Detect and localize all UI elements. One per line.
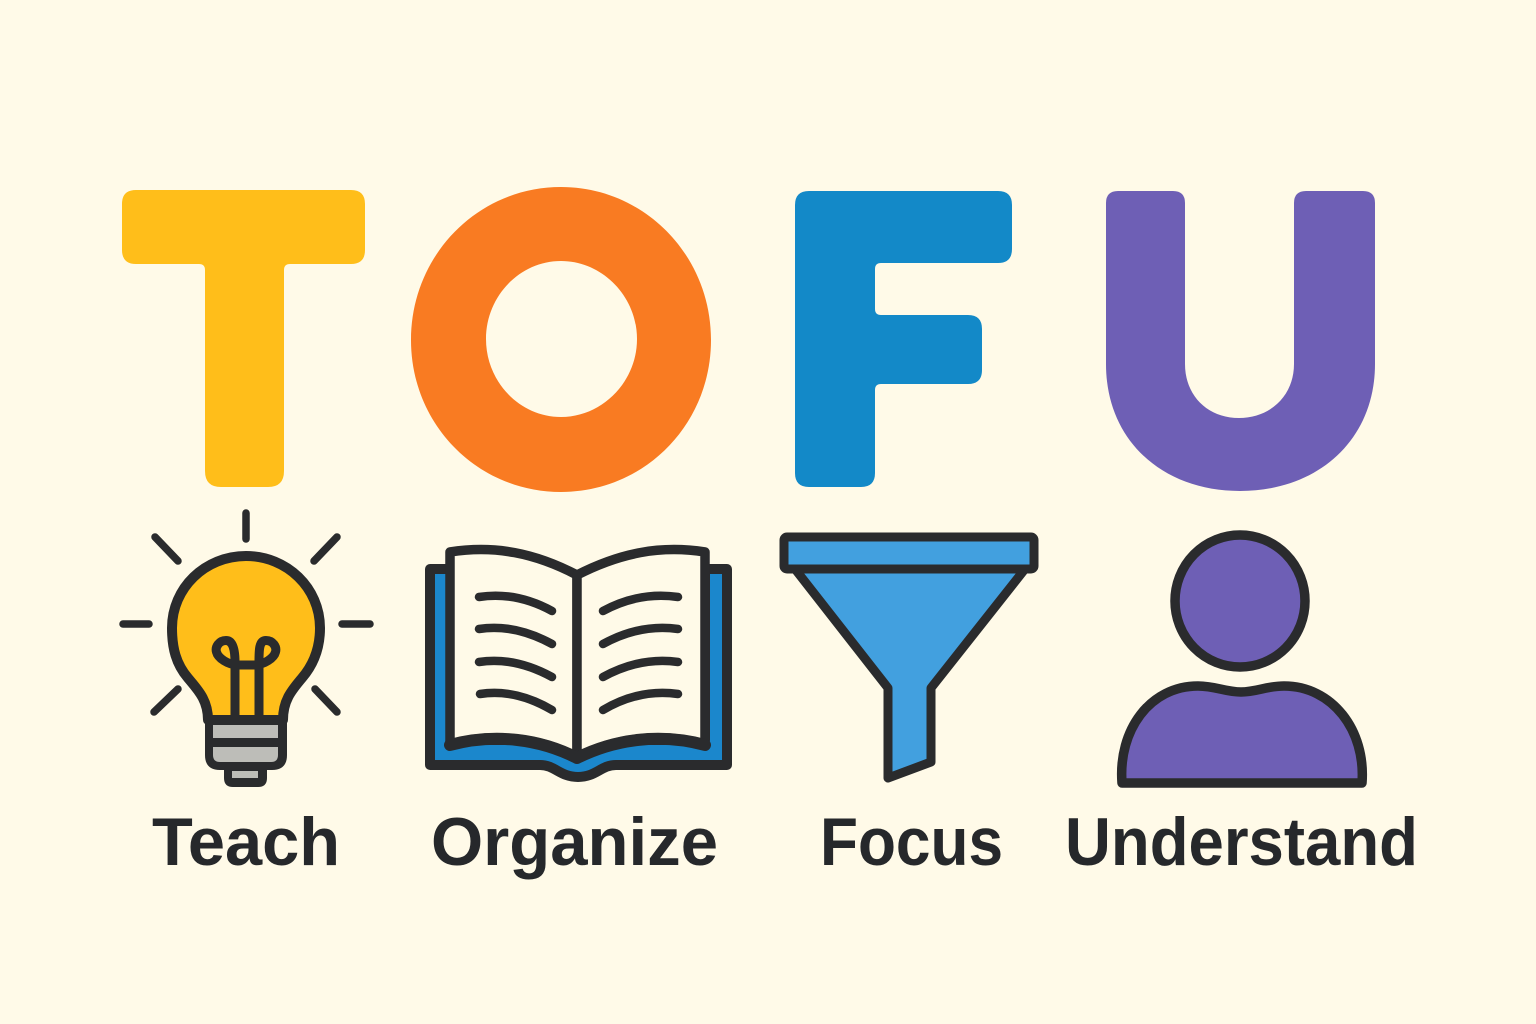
icon: funnel — [784, 537, 1034, 778]
label: Focus: Focus — [820, 804, 1003, 880]
page text lines — [479, 596, 678, 710]
filament — [216, 640, 276, 717]
letter O — [411, 187, 711, 492]
icon: light bulb — [123, 513, 370, 787]
funnel body — [795, 569, 1025, 778]
screw base — [205, 717, 287, 787]
label: Organize: Organize — [431, 804, 718, 880]
icon: open book — [430, 550, 727, 777]
head — [1175, 535, 1305, 667]
right page — [577, 550, 705, 757]
light rays — [123, 513, 370, 712]
base bands — [213, 725, 278, 778]
page bottom edge — [450, 739, 705, 758]
left page — [450, 550, 577, 757]
shoulders — [1122, 686, 1362, 783]
letter U — [1106, 191, 1375, 491]
book cover — [430, 569, 727, 777]
label: Understand: Understand — [1065, 804, 1418, 880]
letter T — [122, 190, 365, 487]
letter F — [795, 191, 1012, 487]
funnel rim — [784, 537, 1034, 569]
bulb glass — [172, 556, 320, 720]
icon: person — [1122, 535, 1362, 783]
label: Teach: Teach — [152, 804, 340, 880]
